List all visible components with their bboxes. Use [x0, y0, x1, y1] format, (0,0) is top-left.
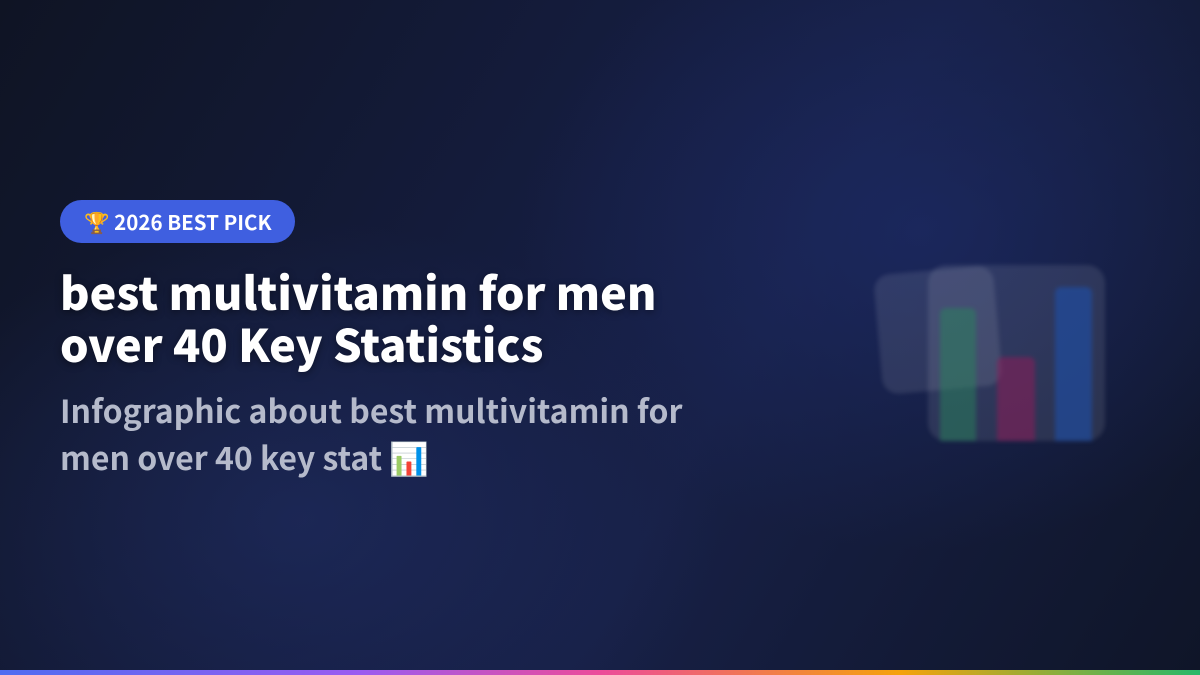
- subtitle: men over 40 key stat 📊: [60, 434, 429, 480]
- icon: bar chart: [874, 264, 1106, 444]
- subtitle: Infographic about best multivitamin for: [60, 387, 682, 433]
- title: over 40 Key Statistics: [60, 310, 543, 375]
- badge: 🏆 2026 BEST PICK: [84, 206, 272, 236]
- subtitle: [60, 387, 682, 480]
- badge: [60, 200, 295, 243]
- title: best multivitamin for men: [60, 258, 657, 323]
- title: [60, 258, 657, 375]
